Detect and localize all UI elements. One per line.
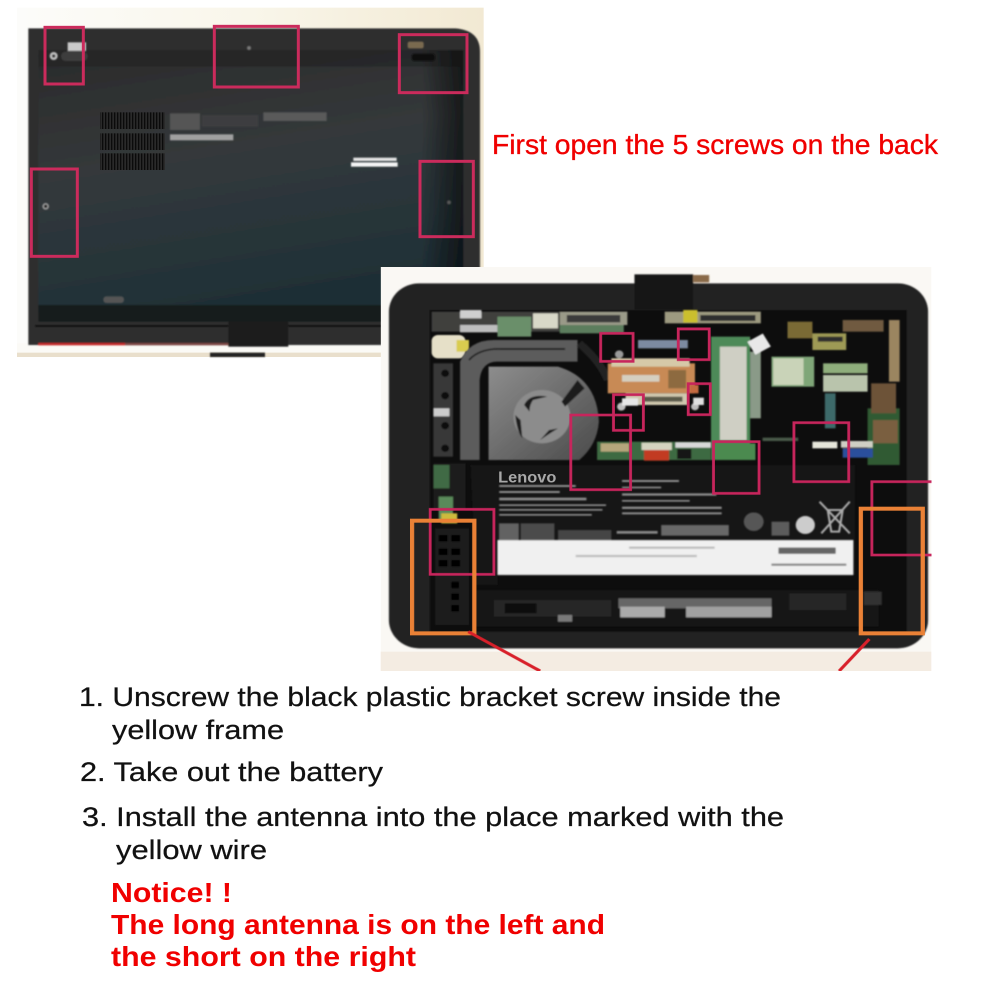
- step 1: yellow frame: [112, 715, 284, 745]
- red marker boxes on back screws: [31, 26, 473, 256]
- left daughter board: [433, 463, 465, 523]
- laptop case: [28, 28, 480, 357]
- photo background: [17, 8, 484, 355]
- step 3: 3. Install the antenna into the place marked with the: [82, 802, 784, 832]
- notice: the short on the right: [111, 941, 416, 972]
- battery logo: Lenovo: [498, 470, 557, 486]
- step 1: [79, 682, 781, 745]
- battery spec text: [499, 480, 815, 543]
- photo: opened laptop interior: [380, 267, 939, 672]
- notice: Notice! !: [111, 877, 232, 908]
- photo background: [381, 267, 936, 671]
- cooling fan and heat pipe: [460, 340, 608, 460]
- notice: [111, 877, 605, 972]
- white barcode label: [497, 540, 853, 575]
- step 3: [82, 802, 784, 865]
- step 1: 1. Unscrew the black plastic bracket screw inside the: [79, 682, 781, 712]
- top edge components: [432, 310, 900, 382]
- left rail: [433, 363, 453, 457]
- left black plastic bracket: [435, 528, 469, 625]
- SSD and wireless cards: [711, 333, 900, 465]
- caption: first open screws: First open the 5 screws on the back: [492, 129, 939, 160]
- connector strip: [597, 438, 873, 461]
- orange bracket frames: [412, 509, 923, 633]
- step 3: yellow wire: [116, 835, 267, 865]
- hinge details: [42, 42, 451, 303]
- copper CPU plate: [608, 350, 704, 411]
- recycling bin symbol: [820, 502, 850, 533]
- black case and strap: [389, 274, 928, 648]
- red antenna wires: [468, 632, 869, 671]
- instruction steps: [79, 682, 784, 865]
- vent grilles: [100, 112, 165, 170]
- step 2: 2. Take out the battery: [80, 757, 384, 787]
- speaker bar: [473, 590, 882, 627]
- battery: [471, 465, 855, 585]
- regulatory labels: [170, 112, 398, 167]
- magenta screw marker boxes: [430, 329, 939, 574]
- notice: The long antenna is on the left and: [111, 909, 605, 940]
- photo: laptop back cover: [17, 8, 484, 357]
